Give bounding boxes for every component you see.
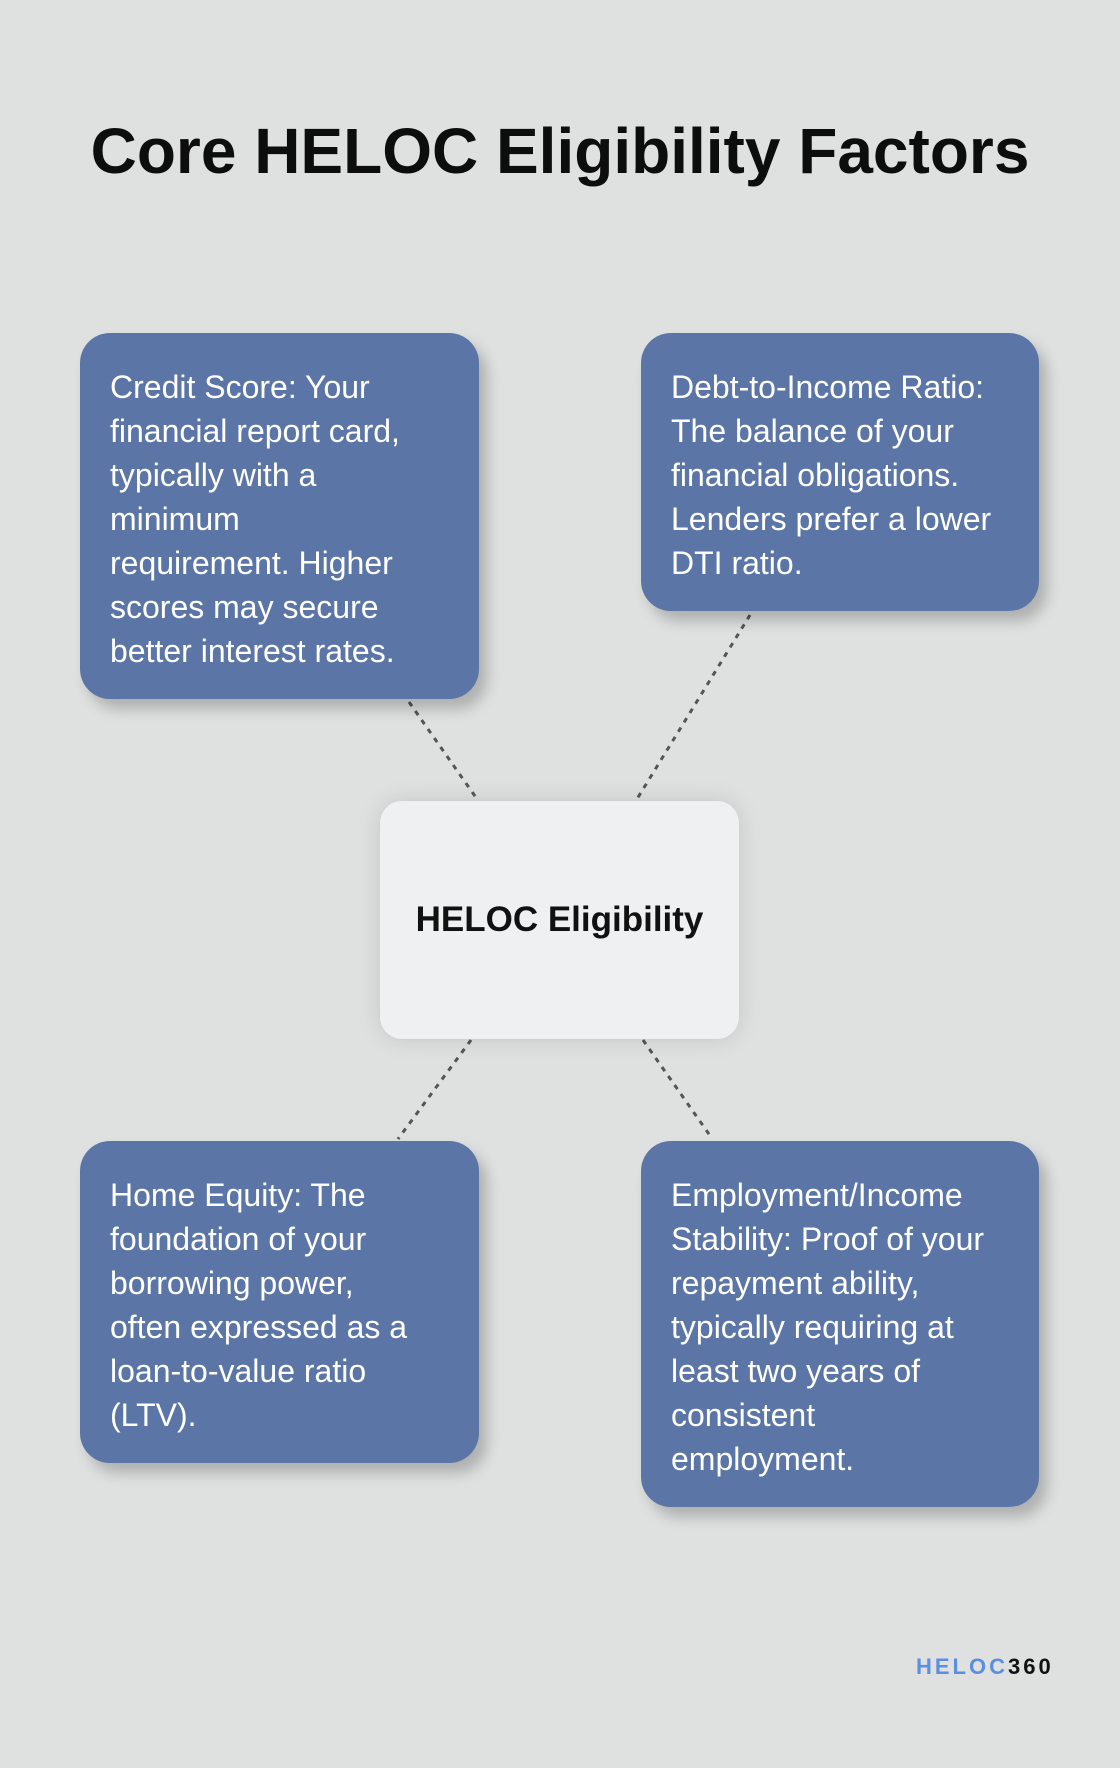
logo: HELOC360 [916,1654,1054,1679]
panel: debt-to-income: Lenders prefer a lower [671,501,991,537]
panel: debt-to-income: DTI ratio. [671,545,803,581]
panel: credit score: scores may secure [110,589,379,625]
panel: home equity [80,1141,479,1463]
panel: home equity: Home Equity: The [110,1177,366,1213]
panel: credit score: requirement. Higher [110,545,393,581]
panel: debt-to-income: The balance of your [671,413,954,449]
panel: credit score [80,333,479,699]
panel: credit score: better interest rates. [110,633,395,669]
panel: debt-to-income: financial obligations. [671,457,959,493]
panel: employment [641,1141,1039,1507]
center node [380,801,739,1039]
panel: home equity: loan-to-value ratio [110,1353,366,1389]
panel: home equity: foundation of your [110,1221,366,1257]
panel: employment: employment. [671,1441,854,1477]
panel: employment: Employment/Income [671,1177,963,1213]
panel: employment: repayment ability, [671,1265,919,1301]
panel: employment: Stability: Proof of your [671,1221,984,1257]
panel: credit score: financial report card, [110,413,400,449]
panel: home equity: borrowing power, [110,1265,354,1301]
panel: employment: typically requiring at [671,1309,954,1345]
panel: credit score: Credit Score: Your [110,369,370,405]
center node: HELOC Eligibility [416,900,703,939]
title: Core HELOC Eligibility Factors [91,115,1029,187]
panel: employment: consistent [671,1397,815,1433]
panel: debt-to-income [641,333,1039,611]
panel: home equity: (LTV). [110,1397,197,1433]
panel: employment: least two years of [671,1353,920,1389]
panel: credit score: typically with a [110,457,316,493]
panel: debt-to-income: Debt-to-Income Ratio: [671,369,984,405]
panel: credit score: minimum [110,501,240,537]
panel: home equity: often expressed as a [110,1309,407,1345]
